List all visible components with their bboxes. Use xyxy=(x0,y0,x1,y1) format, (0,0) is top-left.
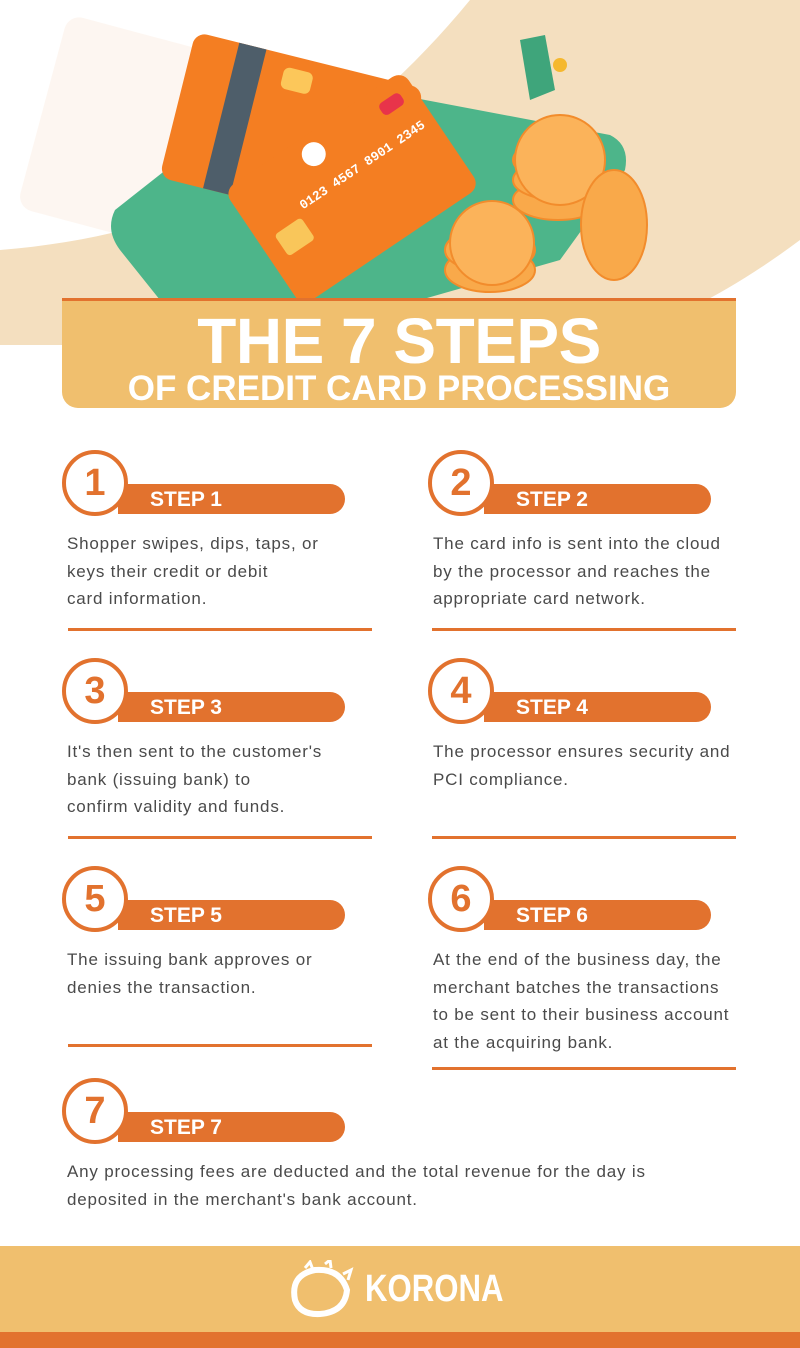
front card: 0123 4567 8901 2345 xyxy=(297,118,428,213)
step 7: 7 xyxy=(84,1090,106,1132)
wallet xyxy=(111,35,626,300)
step 2: appropriate card network. xyxy=(433,589,646,608)
step 2 xyxy=(428,450,721,608)
step 6: to be sent to their business account xyxy=(433,1005,729,1024)
step 2: by the processor and reaches the xyxy=(433,562,711,580)
step 3: It's then sent to the customer's xyxy=(67,742,322,761)
step 2: STEP 2 xyxy=(516,488,588,511)
subtitle: OF CREDIT CARD PROCESSING xyxy=(128,369,670,408)
step 5: 5 xyxy=(84,878,106,920)
step 6 xyxy=(428,866,729,1052)
title main: THE 7 STEPS xyxy=(197,305,601,377)
step 7 xyxy=(62,1078,646,1208)
step 6: At the end of the business day, the xyxy=(433,950,722,969)
step 3: 3 xyxy=(84,670,106,712)
step 3 xyxy=(62,658,345,816)
step 1 xyxy=(62,450,345,608)
step 4 xyxy=(428,658,730,788)
step 4: STEP 4 xyxy=(516,696,588,719)
illustration: wallet with cards and coins xyxy=(20,18,648,298)
step 1: Shopper swipes, dips, taps, or xyxy=(67,534,319,553)
step 7: STEP 7 xyxy=(150,1116,222,1139)
step 1: card information. xyxy=(67,589,207,608)
step 6: merchant batches the transactions xyxy=(433,978,719,996)
step 7: deposited in the merchant's bank account. xyxy=(67,1190,418,1208)
coins xyxy=(445,115,647,292)
step 3: confirm validity and funds. xyxy=(67,797,285,816)
step 5: STEP 5 xyxy=(150,904,222,927)
step 6: 6 xyxy=(450,878,472,920)
step 4: The processor ensures security and xyxy=(433,742,730,761)
logo icon xyxy=(291,1260,354,1318)
logo text: KORONA xyxy=(365,1268,503,1310)
step 5 xyxy=(62,866,345,996)
step 7: Any processing fees are deducted and the total revenue for the day is xyxy=(67,1162,646,1181)
step 3: bank (issuing bank) to xyxy=(67,770,251,788)
step 4: 4 xyxy=(450,670,472,712)
step 1: STEP 1 xyxy=(150,488,222,511)
step 5: denies the transaction. xyxy=(67,978,256,996)
faded card xyxy=(17,14,213,246)
footer xyxy=(0,1246,800,1332)
title banner xyxy=(62,298,736,408)
back card xyxy=(159,32,424,234)
background beige shape xyxy=(0,0,800,345)
step 3: STEP 3 xyxy=(150,696,222,719)
step 1: keys their credit or debit xyxy=(67,562,268,580)
step 6: at the acquiring bank. xyxy=(433,1032,613,1052)
step 2: The card info is sent into the cloud xyxy=(433,534,721,553)
step 5: The issuing bank approves or xyxy=(67,950,312,969)
step 6: STEP 6 xyxy=(516,904,588,927)
step 2: 2 xyxy=(450,462,472,504)
front card xyxy=(224,70,480,307)
step 1: 1 xyxy=(84,462,106,504)
step 4: PCI compliance. xyxy=(433,770,569,788)
